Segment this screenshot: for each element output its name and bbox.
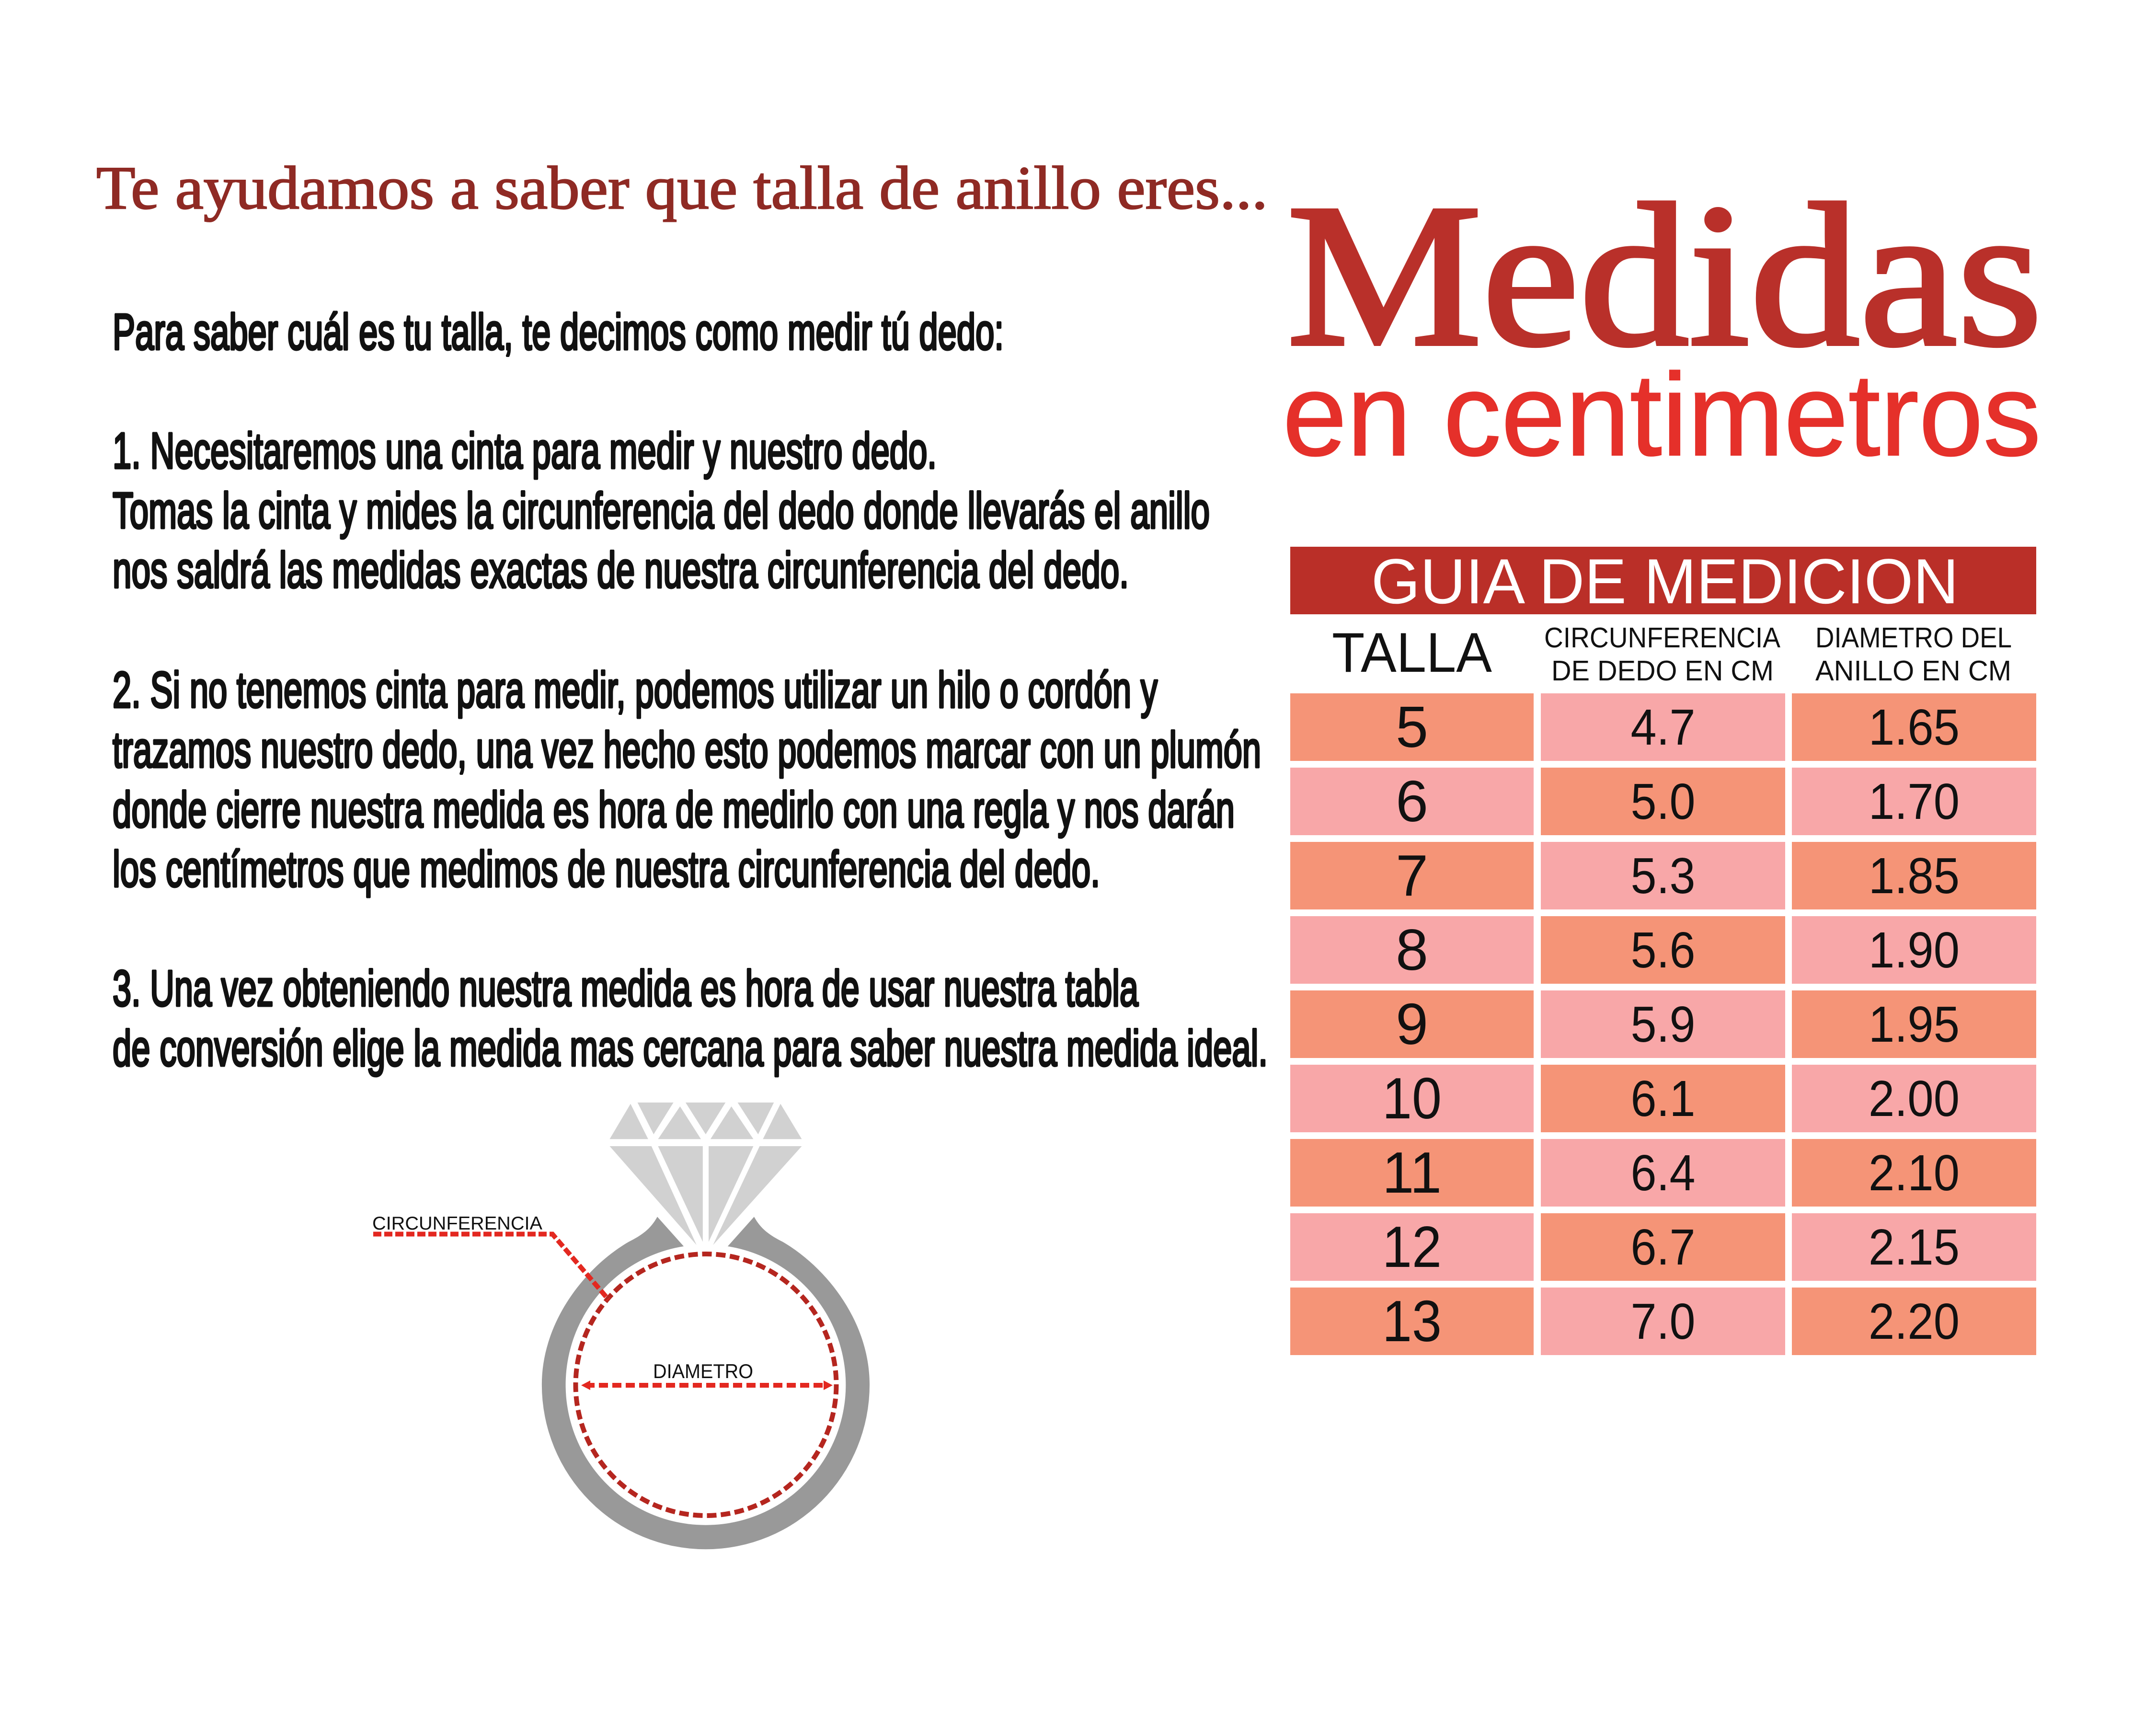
circumference dashed circle — [576, 1254, 837, 1516]
row: talla 7 — [1290, 842, 2036, 909]
heading: Medidas: Medidas — [1287, 162, 2042, 389]
row: talla 12: 2.15 — [1869, 1219, 1960, 1276]
row: talla 7: 5.3 — [1631, 848, 1695, 904]
label: diametro: DIAMETRO — [653, 1360, 753, 1382]
column header: circunferencia: DE DEDO EN CM — [1551, 655, 1774, 687]
column header: circunferencia: CIRCUNFERENCIA — [1544, 622, 1781, 654]
text block: instructions: los centímetros que medimos de nuestra circunferencia del dedo. — [113, 841, 1100, 897]
icon: ring band — [542, 1217, 870, 1549]
row: talla 13: 7.0 — [1631, 1293, 1695, 1350]
panel: measurement table — [1290, 546, 2036, 1355]
row: talla 7: 7 — [1396, 843, 1428, 908]
text block: instructions: donde cierre nuestra medida es hora de medirlo con una regla y nos darán — [113, 782, 1235, 838]
column header: diametro — [1815, 622, 2012, 687]
row: talla 10: 2.00 — [1869, 1070, 1960, 1127]
row: talla 10: 6.1 — [1631, 1070, 1695, 1127]
column header: circunferencia — [1544, 622, 1781, 687]
row: talla 8: 5.6 — [1631, 922, 1695, 978]
row: talla 5: 1.65 — [1869, 699, 1960, 756]
column header: talla: TALLA — [1332, 621, 1492, 684]
text block: instructions: 3. Una vez obteniendo nuestra medida es hora de usar nuestra tabla — [113, 960, 1138, 1017]
text block: instructions: Tomas la cinta y mides la circunferencia del dedo donde llevarás el anillo — [113, 483, 1210, 539]
row: talla 12: 12 — [1382, 1214, 1442, 1279]
row: talla 11: 6.4 — [1631, 1145, 1695, 1201]
diagram: ring — [372, 1103, 870, 1549]
icon: diamond — [609, 1103, 802, 1245]
text block: instructions: trazamos nuestro dedo, una vez hecho esto podemos marcar con un plumón — [113, 722, 1261, 778]
row: talla 10 — [1290, 1065, 2036, 1132]
subheading: en centimetros: en centimetros — [1283, 349, 2041, 480]
row: talla 6 — [1290, 768, 2036, 835]
circumference leader line — [373, 1234, 608, 1300]
row: talla 13: 2.20 — [1869, 1293, 1960, 1350]
row: talla 6: 6 — [1396, 769, 1428, 834]
row: talla 12 — [1290, 1213, 2036, 1281]
table title bar: GUIA DE MEDICION — [1371, 546, 1959, 617]
row: talla 13: 13 — [1382, 1288, 1442, 1354]
row: talla 13 — [1290, 1288, 2036, 1355]
row: talla 6: 5.0 — [1631, 773, 1695, 830]
row: talla 9 — [1290, 990, 2036, 1058]
text block: instructions: Para saber cuál es tu talla, te decimos como medir tú dedo: — [113, 304, 1004, 360]
text block: instructions — [113, 304, 1268, 1077]
row: talla 12: 6.7 — [1631, 1219, 1695, 1276]
column header: diametro: ANILLO EN CM — [1815, 655, 2011, 687]
row: talla 6: 1.70 — [1869, 773, 1960, 830]
row: talla 8: 1.90 — [1869, 922, 1960, 978]
row: talla 8: 8 — [1396, 917, 1428, 982]
column header: diametro: DIAMETRO DEL — [1815, 622, 2012, 654]
row: talla 7: 1.85 — [1869, 848, 1960, 904]
row: talla 5: 5 — [1396, 694, 1428, 759]
text block: instructions: nos saldrá las medidas exactas de nuestra circunferencia del dedo. — [113, 542, 1129, 598]
text block: instructions: de conversión elige la medida mas cercana para saber nuestra medida ideal. — [113, 1020, 1268, 1077]
row: talla 11: 11 — [1382, 1140, 1442, 1205]
text block: instructions: 2. Si no tenemos cinta para medir, podemos utilizar un hilo o cordón y — [113, 662, 1158, 718]
row: talla 9: 9 — [1396, 991, 1428, 1057]
row: talla 9: 5.9 — [1631, 996, 1695, 1053]
row: talla 5 — [1290, 693, 2036, 761]
row: talla 11: 2.10 — [1869, 1145, 1960, 1201]
title: intro heading: Te ayudamos a saber que talla de anillo eres... — [96, 154, 1268, 222]
row: talla 11 — [1290, 1139, 2036, 1207]
row: talla 10: 10 — [1382, 1066, 1442, 1131]
text block: instructions: 1. Necesitaremos una cinta para medir y nuestro dedo. — [113, 423, 937, 479]
row: talla 5: 4.7 — [1631, 699, 1695, 756]
row: talla 9: 1.95 — [1869, 996, 1960, 1053]
diameter arrow — [581, 1380, 833, 1390]
row: talla 8 — [1290, 916, 2036, 984]
label: circunferencia: CIRCUNFERENCIA — [372, 1213, 542, 1234]
